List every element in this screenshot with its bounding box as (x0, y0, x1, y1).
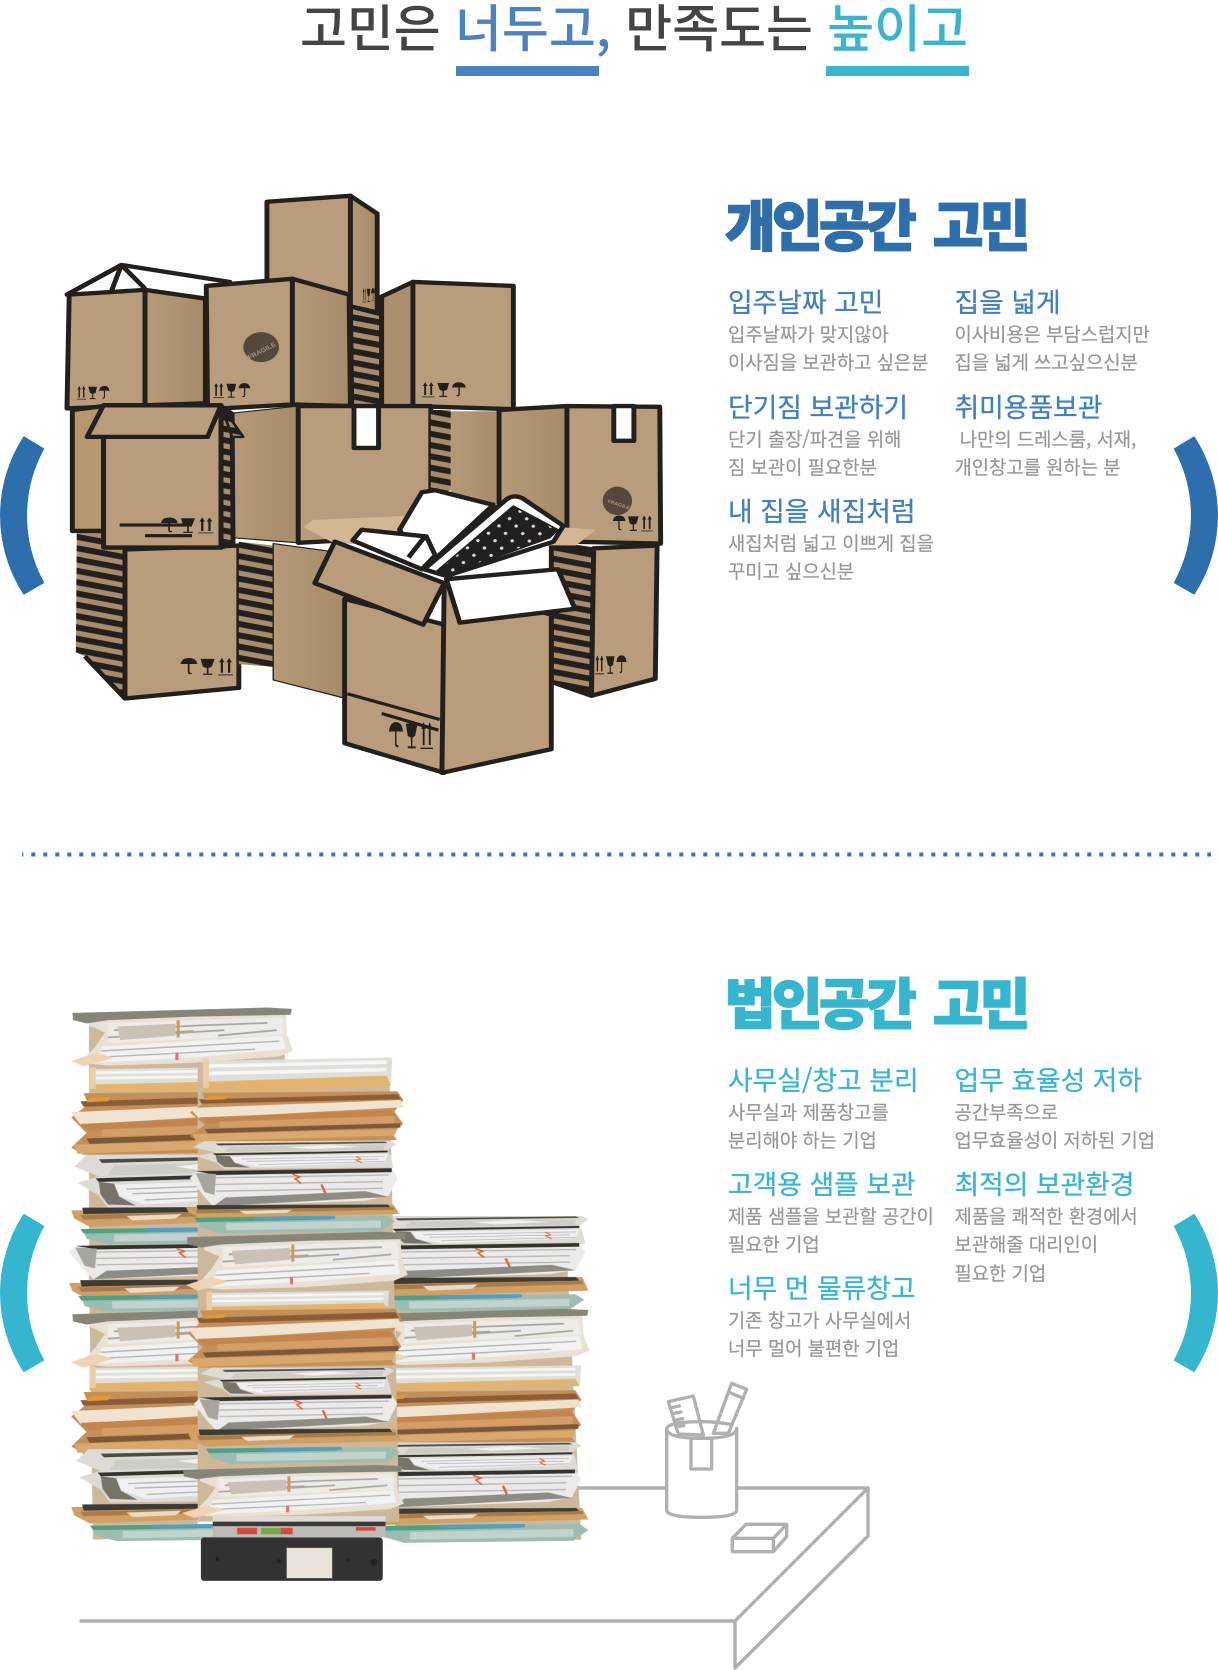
text: distant logistics warehouse (728, 1267, 916, 1361)
text: moving date (728, 281, 929, 375)
text: optimal storage environment: 보관해줄 대리인이 (954, 1230, 1098, 1257)
text: office and warehouse separated: 사무실/창고 분리 (728, 1059, 919, 1098)
text: hobby storage: 나만의 드레스룸, 서재, (960, 425, 1136, 452)
illustration: stacks of paper files (69, 1008, 590, 1581)
box: upper left with open lid (67, 265, 230, 408)
text: moving date: 이사짐을 보관하고 싶은분 (728, 348, 929, 375)
paper stack: right (368, 1216, 590, 1543)
box: far left panel (72, 406, 104, 531)
box: bottom right (551, 544, 657, 696)
cardboard flaps behind contents (304, 516, 596, 546)
text: wider home: 이사비용은 부담스럽지만 (954, 320, 1150, 347)
text: customer sample storage: 고객용 샘플 보관 (728, 1163, 916, 1202)
arc: left blue bracket (1, 438, 43, 594)
box: center with tape (232, 406, 431, 543)
text: like a new home: 내 집을 새집처럼 (728, 490, 916, 529)
text: distant logistics warehouse: 너무 먼 물류창고 (728, 1267, 916, 1306)
box: bottom left (76, 528, 239, 699)
arc: right teal bracket (1175, 1215, 1217, 1371)
text: office and warehouse separated (728, 1059, 919, 1153)
title underline: teal (826, 66, 969, 76)
illustration: pile of cardboard boxes (67, 196, 661, 773)
text: optimal storage environment: 제품을 쾌적한 환경에서 (954, 1202, 1138, 1229)
stripes: behind center (431, 410, 451, 496)
stripes: shaded gap (350, 306, 382, 407)
text: short-term storage: 단기 출장/파견을 위해 (728, 425, 901, 452)
illustration: desk with pen holder (81, 1383, 868, 1668)
text: like a new home (728, 490, 934, 584)
text: distant logistics warehouse: 기존 창고가 사무실에서 (728, 1306, 911, 1333)
text: distant logistics warehouse: 너무 멀어 불편한 기업 (728, 1334, 899, 1361)
text: like a new home: 새집처럼 넓고 이쁘게 집을 (728, 529, 934, 556)
binder: black binder under stack (201, 1516, 386, 1581)
icon: eraser (732, 1524, 787, 1552)
text: customer sample storage: 필요한 기업 (728, 1230, 820, 1257)
text: moving date: 입주날짜 고민 (728, 281, 883, 320)
text: wider home: 집을 넓게 쓰고싶으신분 (954, 348, 1138, 375)
icon: pen holder with ruler and pencil (667, 1383, 747, 1517)
text: low work efficiency (954, 1059, 1155, 1153)
paper stack: left (69, 1008, 298, 1541)
text: short-term storage: 짐 보관이 필요한분 (728, 453, 877, 480)
text: office and warehouse separated: 분리해야 하는 기업 (728, 1126, 877, 1153)
box: flap box front left (87, 405, 243, 548)
text: optimal storage environment (954, 1163, 1138, 1286)
box: right with tape and fragile seal (499, 406, 661, 544)
box: bottom center (239, 542, 346, 699)
open box in the foreground (315, 542, 575, 773)
text: wider home (954, 281, 1150, 375)
text: low work efficiency: 업무효율성이 저하된 기업 (954, 1126, 1155, 1153)
box: side panel behind right (451, 411, 499, 504)
divider: dotted line (22, 852, 1211, 856)
heading: personal space: 개인공간 고민 (725, 182, 1027, 262)
text: moving date: 입주날짜가 맞지않아 (728, 320, 889, 347)
heading: business space: 법인공간 고민 (725, 960, 1027, 1040)
text: optimal storage environment: 필요한 기업 (954, 1259, 1046, 1286)
text: like a new home: 꾸미고 싶으신분 (728, 557, 854, 584)
box: upper middle with fragile seal: FRAGILE (247, 341, 278, 361)
contents: white papers and keyboard (353, 490, 563, 576)
text: hobby storage: 취미용품보관 (954, 386, 1102, 425)
text: customer sample storage: 제품 샘플을 보관할 공간이 (728, 1202, 934, 1229)
arc: right blue bracket (1175, 438, 1217, 594)
box: upper middle with fragile seal (206, 279, 350, 409)
title underline: blue (456, 66, 599, 76)
box: upper right (382, 282, 513, 409)
arc: left teal bracket (1, 1215, 43, 1371)
text: hobby storage (954, 386, 1136, 480)
text: short-term storage (728, 386, 908, 480)
text: optimal storage environment: 최적의 보관환경 (954, 1163, 1135, 1202)
text: wider home: 집을 넓게 (954, 281, 1061, 320)
paper stack: middle (182, 1057, 408, 1522)
box: tall top box (267, 196, 377, 312)
text: hobby storage: 개인창고를 원하는 분 (954, 453, 1121, 480)
box: right with tape and fragile seal: FRAGILE (607, 499, 631, 512)
text: short-term storage: 단기짐 보관하기 (728, 386, 908, 425)
text: customer sample storage (728, 1163, 934, 1257)
desk outline (81, 1488, 868, 1668)
text: low work efficiency: 공간부족으로 (954, 1098, 1058, 1125)
text: office and warehouse separated: 사무실과 제품창고를 (728, 1098, 889, 1125)
text: low work efficiency: 업무 효율성 저하 (954, 1059, 1142, 1098)
